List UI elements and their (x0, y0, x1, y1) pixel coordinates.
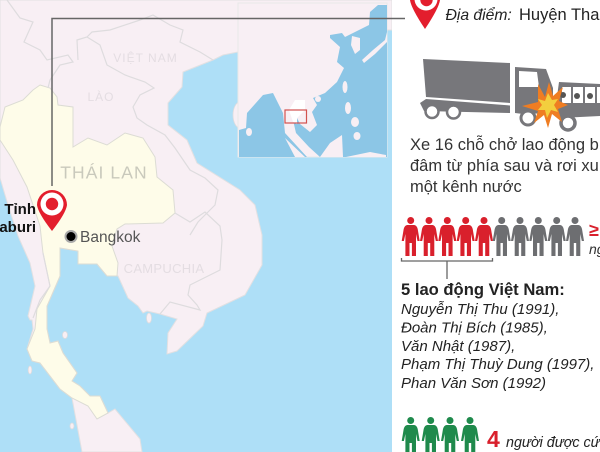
leader line end (392, 18, 405, 20)
bracket stem (446, 261, 448, 279)
label: Tỉnh Kanchanaburi (0, 201, 36, 236)
inset locator map (238, 3, 387, 157)
list of names: Văn Nhật (1987), (401, 338, 515, 355)
country label: Thái Lan: THÁI LAN (60, 162, 148, 182)
bracket (402, 258, 492, 261)
description text: Xe 16 chỗ chở lao động b (410, 135, 599, 154)
front truck wheel (521, 111, 535, 125)
inset: Pacific and South China Sea (293, 5, 387, 157)
location text: Địa điểm: (446, 6, 512, 24)
leader line (52, 18, 405, 186)
inset: Sumatra (285, 138, 305, 157)
country label: Lào: LÀO (87, 89, 115, 104)
list of names (401, 301, 594, 392)
truck wheels (426, 105, 460, 118)
rescued caption: người được cứ (506, 435, 600, 451)
van body (556, 82, 600, 118)
inset: Borneo (320, 135, 343, 157)
right panel background (392, 0, 600, 452)
location pin in panel (410, 0, 440, 29)
pictogram: 5 Vietnamese workers in red (402, 217, 493, 256)
inset: Bay of Bengal (239, 93, 307, 157)
Bangkok marker: Bangkok (80, 229, 141, 246)
inset: red locator box (285, 110, 306, 123)
description text: một kênh nước (410, 178, 522, 196)
country label: Việt Nam: VIỆT NAM (113, 50, 178, 65)
land: Thailand (0, 85, 175, 419)
truck cab (515, 67, 553, 114)
list of names: Phan Văn Sơn (1992) (401, 375, 546, 392)
truck chassis (420, 99, 510, 113)
icon: truck crash (420, 59, 600, 130)
description text (410, 135, 599, 196)
islands (28, 102, 247, 429)
map: Thailand and neighbouring countries (0, 0, 392, 452)
inset: Philippines (345, 102, 360, 140)
location pin on map (37, 190, 67, 231)
explosion (522, 82, 568, 128)
list of names: Phạm Thị Thuỳ Dung (1997), (401, 356, 594, 373)
rescued count: 4 (487, 426, 500, 452)
label: Tỉnh Kanchanaburi: Tỉnh (4, 201, 36, 218)
land: mainland Southeast Asia (0, 0, 392, 452)
inset: Korea (351, 36, 360, 54)
location text (446, 6, 600, 24)
borders between countries (7, 0, 222, 318)
pictogram: 4 rescued in green (402, 417, 479, 452)
location text: Huyện Tha (519, 6, 600, 24)
inset: Japan (362, 32, 387, 63)
description text: đâm từ phía sau và rơi xu (410, 157, 599, 175)
inset: Indonesia east (346, 152, 386, 157)
pictogram: other passengers in grey (493, 217, 584, 256)
truck container (423, 59, 510, 103)
red death count symbol: ≥ (589, 220, 599, 240)
inset: Hainan and Sri Lanka (246, 96, 321, 136)
list of names: Đoàn Thị Bích (1985), (401, 320, 548, 336)
list of names: Nguyễn Thị Thu (1991), (401, 301, 559, 318)
inset: Taiwan (342, 81, 348, 93)
inset: Thailand highlight (289, 100, 305, 124)
country label: Campuchia: CAMPUCHIA (124, 261, 204, 276)
van windows with passengers (562, 87, 600, 103)
van wheel (561, 116, 575, 130)
heading: 5 Vietnamese workers: 5 lao động Việt Nam: (401, 280, 565, 299)
